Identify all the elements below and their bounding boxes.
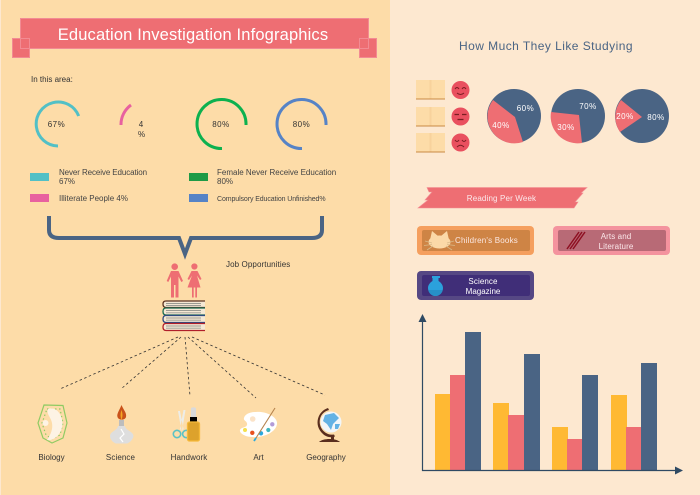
bar chart	[418, 314, 683, 474]
icon: biology cell	[38, 405, 67, 443]
icon: scissors and glue	[173, 407, 200, 441]
ring: 80% green	[197, 100, 246, 149]
tag: arts and literature	[553, 226, 670, 255]
ribbon: reading per week: Reading Per Week	[467, 194, 537, 203]
panel: left background	[1, 0, 390, 495]
pie chart: 70/30: 30%	[557, 123, 575, 132]
group 1 bars	[435, 332, 481, 470]
icon: red brushes	[567, 232, 585, 249]
legend: illiterate people: Illiterate People 4%	[59, 194, 128, 203]
title banner	[12, 18, 376, 58]
group 2 bars	[493, 354, 540, 470]
text: job opportunities: Job Opportunities	[226, 260, 290, 269]
book 3	[163, 316, 205, 322]
text: art: Art	[253, 453, 264, 462]
legend: female never receive education: Female Never Receive Education	[217, 168, 336, 177]
text: science: Science	[106, 453, 136, 462]
icon: book 1	[416, 80, 445, 99]
legend: never receive education	[30, 168, 147, 186]
legend: never receive education: Never Receive Education	[59, 168, 147, 177]
ring: 4%: 4	[139, 120, 144, 129]
heading: how much they like studying: How Much They Like Studying	[459, 39, 633, 53]
chart axes	[418, 314, 683, 474]
ring: 80% blue	[277, 100, 326, 149]
icon: happy face	[452, 81, 470, 99]
tag: science magazine: Science	[468, 277, 498, 286]
icon: stack of books	[163, 301, 205, 330]
legend	[30, 168, 336, 203]
legend: compulsory education unfinished: Compulsory Education Unfinished%	[217, 196, 325, 203]
icon: flask	[428, 276, 443, 296]
pie chart: 70/30: 70%	[579, 102, 597, 111]
ring: 4%: %	[138, 130, 145, 139]
icon: art palette	[240, 408, 277, 441]
brace connector	[49, 216, 322, 254]
legend: female never receive education: 80%	[217, 177, 233, 186]
group 4 bars	[611, 363, 657, 470]
ribbon: reading per week	[418, 188, 587, 208]
pie chart: 80/20	[615, 89, 669, 143]
pie chart: 70/30	[551, 89, 605, 143]
tag: children's books: Children's Books	[455, 236, 518, 245]
text: in this area: In this area:	[31, 75, 73, 84]
icon: cat	[424, 231, 455, 250]
text: biology: Biology	[38, 453, 65, 462]
tag: arts and literature: Arts and	[601, 232, 631, 241]
icon: geography globe	[318, 408, 342, 442]
ring: 80% green: 80%	[212, 120, 230, 129]
ring: 67%: 67%	[48, 120, 65, 129]
icon: man and woman	[167, 263, 202, 298]
tag: children's books	[417, 226, 534, 255]
pie chart: 60/40: 60%	[517, 104, 534, 113]
group 3 bars	[552, 375, 598, 470]
icon: neutral face	[452, 108, 470, 126]
book 4	[163, 324, 205, 330]
dashed connector lines	[60, 337, 325, 398]
icon: science burner	[110, 405, 134, 444]
pie chart: 60/40: 40%	[492, 121, 510, 130]
tag: arts and literature: Literature	[599, 242, 634, 251]
ring: 67%	[36, 102, 79, 146]
pie chart: 80/20: 20%	[616, 112, 634, 121]
text: geography: Geography	[306, 453, 346, 462]
legend: female never receive education	[189, 168, 336, 186]
tag: science magazine	[417, 271, 534, 300]
legend: compulsory education unfinished	[189, 194, 325, 203]
icon: book 3	[416, 133, 445, 152]
text: handwork: Handwork	[171, 453, 208, 462]
tag: science magazine: Magazine	[466, 287, 501, 296]
ring: 80% blue: 80%	[293, 120, 310, 129]
book 1	[163, 301, 205, 308]
pie chart: 80/20: 80%	[647, 113, 665, 122]
legend: never receive education: 67%	[59, 177, 75, 186]
title banner: Education Investigation Infographics	[58, 26, 328, 44]
icon: book 2	[416, 107, 445, 126]
pie chart: 60/40	[487, 89, 541, 143]
ring: 4%	[121, 105, 145, 139]
icon: sad face	[452, 134, 470, 152]
book 2	[163, 308, 205, 315]
